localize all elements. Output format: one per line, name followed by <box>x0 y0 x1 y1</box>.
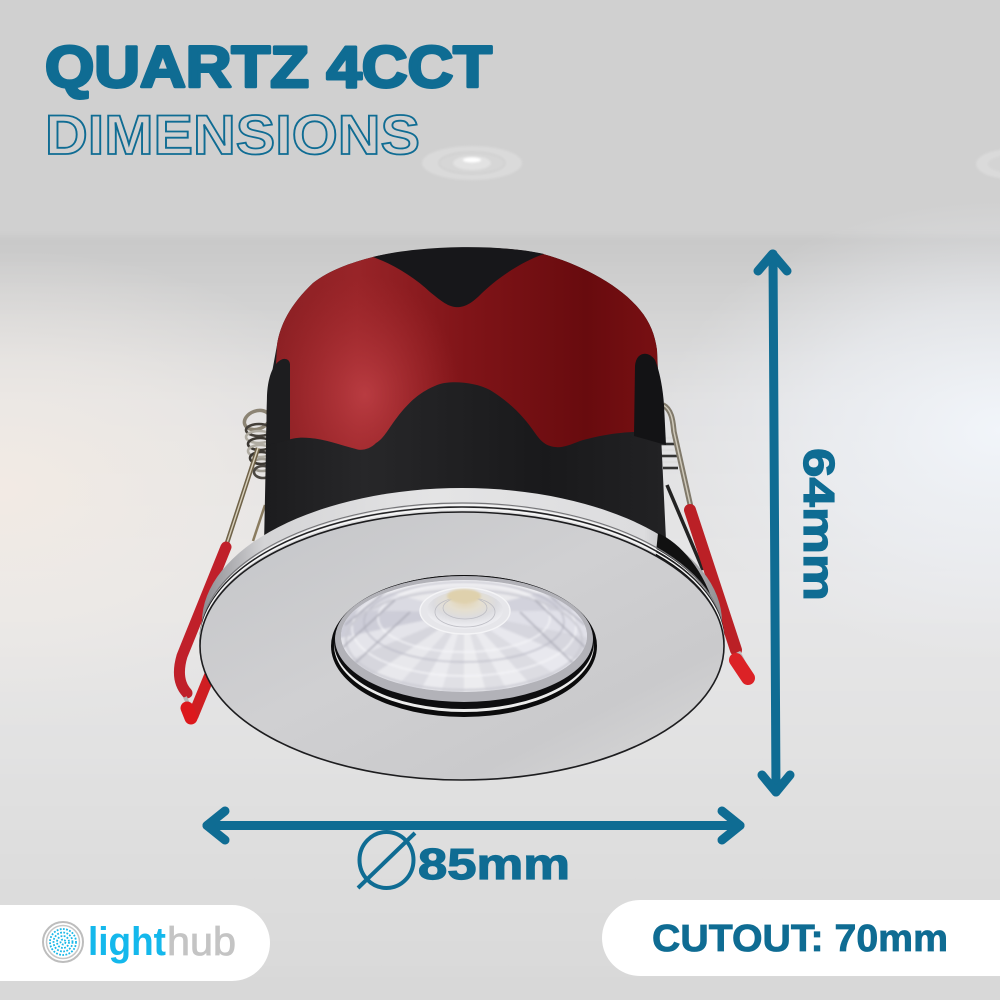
height arrow <box>758 254 790 792</box>
black gasket <box>650 533 716 612</box>
ceiling downlight, background <box>422 146 522 180</box>
lens outer ring <box>331 575 597 717</box>
lens centre dome and LED <box>420 588 510 634</box>
right spring clip <box>658 405 748 678</box>
product: fire rated downlight <box>179 240 748 780</box>
lens facets <box>341 581 587 692</box>
black housing <box>264 248 666 545</box>
title: QUARTZ 4CCT <box>45 35 492 100</box>
diameter symbol <box>358 832 415 888</box>
width arrow <box>207 811 740 840</box>
height label: 64mm <box>794 448 843 601</box>
width label: 85mm <box>418 840 570 889</box>
logo icon <box>43 922 83 962</box>
logo wordmark: light <box>88 920 166 964</box>
left black tab <box>266 359 290 445</box>
ceiling downlight, right edge <box>976 149 1000 179</box>
flange back band <box>202 488 722 756</box>
flange face <box>200 512 724 780</box>
red fire hood <box>276 248 658 450</box>
black top patch <box>373 247 544 307</box>
left spring clip <box>179 407 272 718</box>
cutout text: CUTOUT: 70mm <box>652 918 948 960</box>
flange rim lines <box>200 503 724 777</box>
logo pill <box>0 905 270 981</box>
subtitle: outlined: DIMENSIONS <box>45 103 420 166</box>
cutout pill <box>602 900 1000 976</box>
logo wordmark: hub <box>167 920 236 964</box>
right black tab <box>634 354 666 445</box>
